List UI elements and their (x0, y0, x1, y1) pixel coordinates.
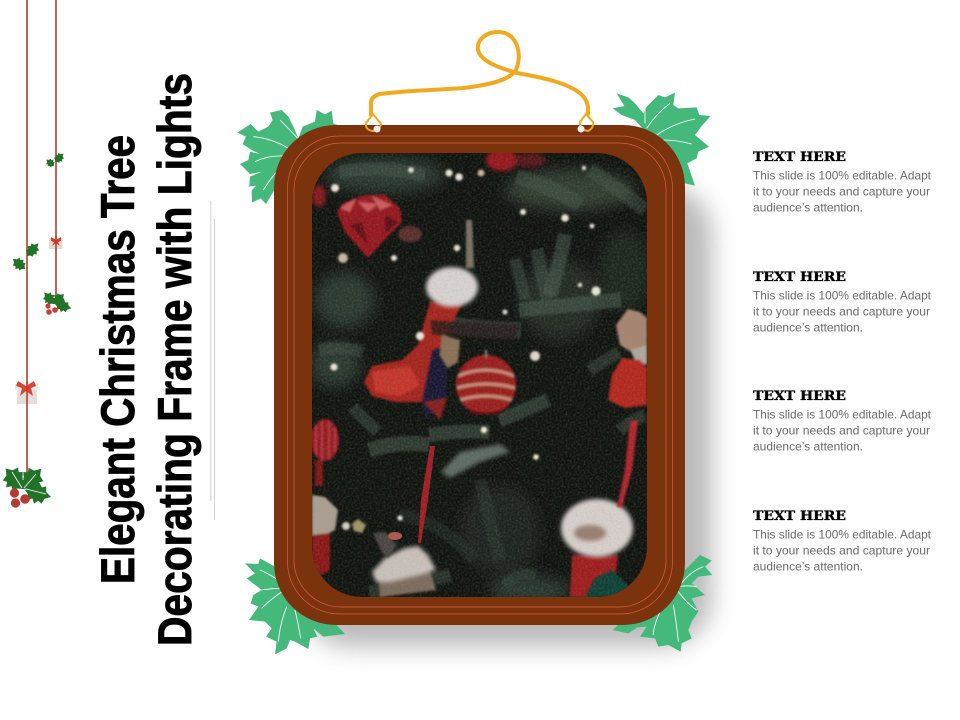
ornament: top red balls (312, 149, 546, 207)
ornament: stocking fur (426, 267, 478, 307)
leaf: top left (237, 110, 342, 204)
title (91, 73, 201, 646)
text block 2 (753, 270, 932, 334)
tree background (312, 153, 647, 597)
text block 4: it to your needs and capture your (753, 544, 930, 558)
ornament: bottom right fur stocking (561, 420, 638, 597)
icon: small leaves on right string (44, 150, 67, 169)
string: right (55, 0, 57, 296)
fairy lights (330, 166, 601, 521)
hanging rope (366, 32, 593, 132)
light foliage highlight (441, 444, 510, 478)
rope cord (371, 32, 588, 115)
text block 1: audience’s attention. (753, 200, 863, 214)
right eye loop (580, 114, 593, 131)
frame outer inlay line (288, 136, 672, 614)
left eye loop (366, 114, 381, 131)
text block 4: audience’s attention. (753, 560, 863, 574)
icon: holly on right string (40, 288, 73, 315)
title divider lines (211, 201, 214, 520)
text block 3: it to your needs and capture your (753, 424, 930, 438)
icon: small gift on right string (49, 236, 62, 250)
frame body (274, 125, 685, 625)
text block 1: TEXT HERE (753, 150, 846, 165)
title: Decorating Frame with Lights (148, 73, 201, 646)
pine branches (320, 169, 645, 592)
text block 4 (753, 509, 932, 574)
ornament: small red bauble left (311, 419, 366, 575)
ornament: teddy and red stocking right (608, 309, 647, 408)
text block 2: TEXT HERE (753, 270, 846, 285)
icon: large holly on left string (0, 461, 54, 508)
text block 2: it to your needs and capture your (753, 304, 930, 318)
ornament: red glass bauble (337, 195, 422, 258)
photo: christmas tree (310, 149, 650, 604)
string: left (26, 0, 28, 476)
ornament: bottom centre fur and mouse (372, 446, 436, 597)
right hook (578, 126, 584, 132)
text block 3: audience’s attention. (753, 440, 863, 454)
holly leaves behind frame (237, 93, 712, 654)
leaf: bottom left (245, 558, 345, 654)
frame shadow (300, 185, 712, 647)
icon: small leaves on left string (9, 239, 43, 274)
ornament: striped bauble (456, 350, 516, 415)
left hanging decorations (0, 0, 73, 508)
left hook (374, 126, 380, 132)
wooden frame (274, 125, 685, 625)
icon: gift on left string (15, 381, 38, 404)
text block 3: This slide is 100% editable. Adapt (753, 408, 932, 422)
ornament: red stocking (364, 220, 520, 420)
text block 4: This slide is 100% editable. Adapt (753, 528, 932, 542)
text block 1: it to your needs and capture your (753, 184, 930, 198)
leaf: bottom right (613, 555, 712, 652)
text block 2: audience’s attention. (753, 320, 863, 334)
text block 4: TEXT HERE (753, 509, 846, 524)
out-of-focus foliage (310, 157, 650, 604)
title: Elegant Christmas Tree (91, 135, 144, 584)
leaf: top right (613, 93, 711, 186)
texture noise (312, 153, 647, 597)
text block 2: This slide is 100% editable. Adapt (753, 288, 932, 302)
frame inner inlay line (294, 143, 666, 607)
text block 1 (753, 150, 932, 214)
text block 3 (753, 389, 932, 454)
text block 1: This slide is 100% editable. Adapt (753, 168, 932, 182)
text block 3: TEXT HERE (753, 389, 846, 404)
